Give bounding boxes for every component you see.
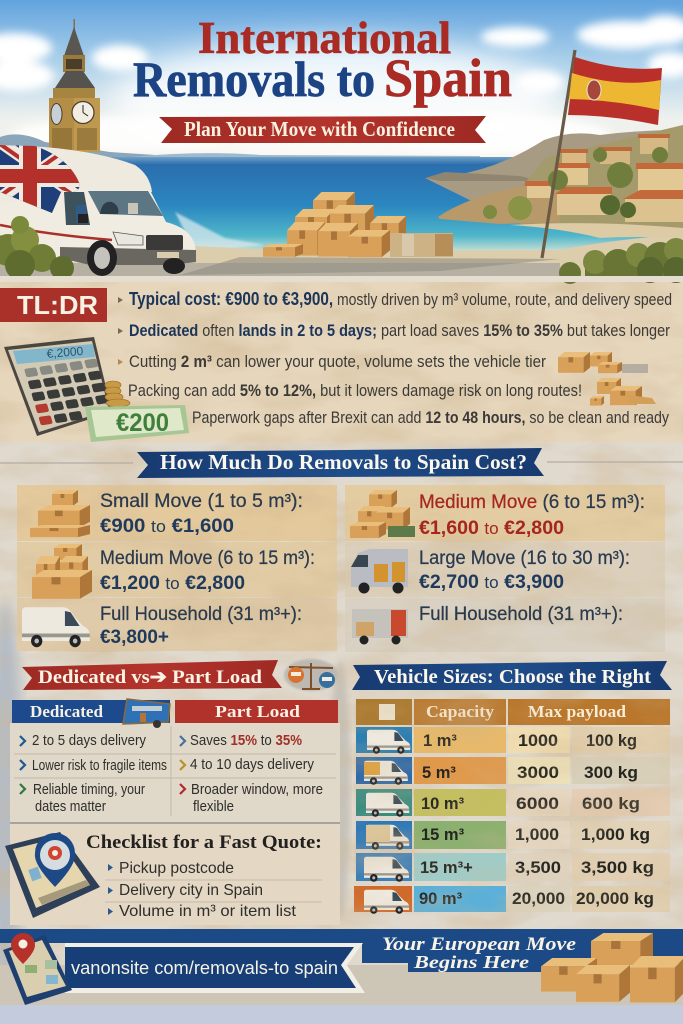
card: medium move: Medium Move (6 to 15 m³):	[100, 547, 315, 569]
tagline: Begins Here	[413, 952, 529, 972]
hero illustration	[0, 0, 683, 284]
row: 15 m3 plus: 15 m³+	[420, 859, 473, 877]
row: 15 m3: 1,000 kg	[581, 826, 650, 844]
row: 15 m3: 15 m³	[421, 826, 465, 844]
heading: vehicle sizes	[352, 661, 672, 690]
footer banner	[0, 929, 683, 1005]
row: 1 m3: 1 m³	[423, 732, 457, 750]
column: part load	[175, 700, 338, 815]
summary bullets: Packing can add 5% to 12%, but it lowers damage risk on long routes!	[128, 382, 582, 400]
sea	[0, 157, 683, 253]
card: large move	[351, 547, 630, 594]
row: 90 m3: 20,000	[512, 890, 565, 908]
card: full household left: Full Household (31 m³+):	[100, 603, 302, 625]
card: full household left	[22, 603, 302, 648]
table header: Capacity	[426, 702, 495, 721]
row: 10 m3	[356, 789, 670, 817]
column: dedicated: dates matter	[35, 798, 106, 815]
card: small move: €900 to €1,600	[100, 515, 234, 537]
checklist heading: Checklist for a Fast Quote:	[86, 832, 322, 853]
icon: calculator	[4, 337, 113, 436]
heading: dedicated vs part load: Dedicated vs➔ Part Load	[38, 667, 262, 688]
row: 90 m3: 90 m³	[419, 890, 463, 908]
column: part load: flexible	[193, 798, 234, 815]
card: medium move highlighted	[350, 490, 645, 539]
row: 15 m3 plus: 3,500 kg	[581, 859, 654, 877]
village trees	[483, 147, 668, 220]
heading: vehicle sizes: Vehicle Sizes: Choose the Right	[374, 666, 651, 688]
stack of delivery boxes	[541, 933, 683, 1002]
row: 5 m3: 3000	[517, 764, 559, 782]
summary bullets	[118, 289, 672, 427]
stack of cardboard boxes	[263, 192, 453, 257]
column: part load: Saves 15% to 35%	[190, 732, 302, 749]
table header	[356, 699, 670, 725]
panel: TL;DR	[0, 288, 672, 442]
row: 10 m3: 600 kg	[582, 795, 640, 813]
village buildings	[525, 134, 683, 222]
icon: calculator: €,2000	[46, 344, 84, 361]
column: dedicated	[12, 700, 170, 815]
left shrubs	[0, 216, 74, 280]
TL:DR tag	[0, 288, 107, 322]
title: Removals to	[133, 51, 375, 107]
row: 15 m3: 1,000	[515, 826, 559, 844]
icon: banknote: €200	[116, 409, 169, 437]
card: small move	[30, 490, 303, 537]
row: 1 m3: 100 kg	[586, 732, 637, 750]
clock tower	[49, 19, 100, 152]
tagline: Your European Move	[382, 934, 577, 955]
row: 90 m3: 20,000 kg	[576, 890, 654, 908]
card: medium move highlighted: €1,600 to €2,800	[419, 517, 564, 539]
row: 15 m3 plus: 3,500	[515, 859, 561, 877]
icon: blue van	[123, 699, 170, 728]
row: 15 m3	[356, 821, 670, 850]
column: dedicated: Lower risk to fragile items	[32, 757, 167, 774]
distant mountains	[0, 134, 480, 162]
URL ribbon	[65, 943, 365, 993]
column: dedicated: 2 to 5 days delivery	[32, 732, 146, 749]
right shrubs	[559, 238, 683, 284]
title: International	[198, 13, 451, 63]
coastal hills	[425, 125, 683, 238]
panel: cost cards	[17, 485, 665, 652]
summary bullets: Paperwork gaps after Brexit can add 12 to 48 hours, so be clean and ready	[192, 409, 670, 427]
card: large move: Large Move (16 to 30 m³):	[419, 547, 630, 569]
flag pole and Spanish flag	[542, 50, 662, 258]
column: dedicated: Dedicated	[30, 702, 103, 721]
subtitle ribbon: Plan Your Move with Confidence	[184, 117, 455, 141]
summary bullets: Cutting 2 m³ can lower your quote, volume sets the vehicle tier	[129, 353, 546, 371]
title: Spain	[384, 48, 512, 108]
row: 5 m3: 300 kg	[584, 764, 638, 782]
row: 5 m3	[356, 757, 670, 785]
card: full household right: Full Household (31 m³+):	[419, 603, 623, 625]
icon: packed boxes	[590, 378, 656, 406]
column: part load: 4 to 10 days delivery	[190, 756, 314, 773]
row: 1 m3: 1000	[518, 732, 558, 750]
URL ribbon: vanonsite com/removals-to spain	[71, 957, 338, 978]
row: 1 m3	[356, 727, 670, 754]
waves	[175, 212, 265, 252]
checklist items: Volume in m³ or item list	[119, 903, 297, 920]
sky	[0, 0, 683, 170]
card: large move: €2,700 to €3,900	[419, 571, 564, 593]
table: vehicle sizes	[354, 699, 670, 914]
van with union flag	[0, 133, 196, 276]
checklist items	[105, 860, 322, 920]
summary bullets: Dedicated often lands in 2 to 5 days; part load saves 15% to 35% but takes longer	[129, 322, 670, 340]
card: small move: Small Move (1 to 5 m³):	[100, 490, 303, 512]
checklist items: Delivery city in Spain	[119, 882, 263, 899]
panel: checklist	[5, 823, 340, 925]
card: medium move	[32, 544, 315, 599]
card: full household left: €3,800+	[100, 626, 169, 648]
column: part load: Part Load	[215, 702, 300, 721]
heading: dedicated vs part load	[22, 660, 282, 690]
TL:DR tag: TL:DR	[17, 290, 98, 320]
icon: balance scales	[284, 659, 338, 691]
title	[133, 13, 512, 108]
checklist items: Pickup postcode	[119, 860, 234, 877]
card: medium move: €1,200 to €2,800	[100, 572, 245, 594]
icon: banknote	[85, 405, 189, 442]
card: full household right	[352, 603, 623, 644]
panel: dedicated vs part load comparison	[10, 699, 340, 822]
tagline	[382, 934, 577, 972]
icon: coins	[105, 381, 130, 407]
row: 90 m3	[354, 886, 670, 914]
card: medium move highlighted: Medium Move (6 to 15 m³):	[419, 491, 645, 513]
heading: how much do removals cost: How Much Do Removals to Spain Cost?	[160, 450, 527, 474]
column: part load: Broader window, more	[191, 781, 323, 798]
row: 10 m3: 10 m³	[421, 795, 465, 813]
icon: small boxes	[558, 352, 648, 373]
heading: how much do removals cost	[0, 448, 683, 478]
icon: phone with pin	[3, 933, 72, 1005]
row: 10 m3: 6000	[516, 795, 559, 813]
row: 5 m3: 5 m³	[422, 764, 456, 782]
footer top blue band	[0, 929, 683, 972]
table header: Max payload	[528, 702, 627, 721]
column: dedicated: Reliable timing, your	[33, 781, 145, 798]
row: 15 m3 plus	[356, 853, 670, 882]
sand and road	[0, 234, 683, 278]
icon: tablet with location pin	[5, 832, 100, 918]
